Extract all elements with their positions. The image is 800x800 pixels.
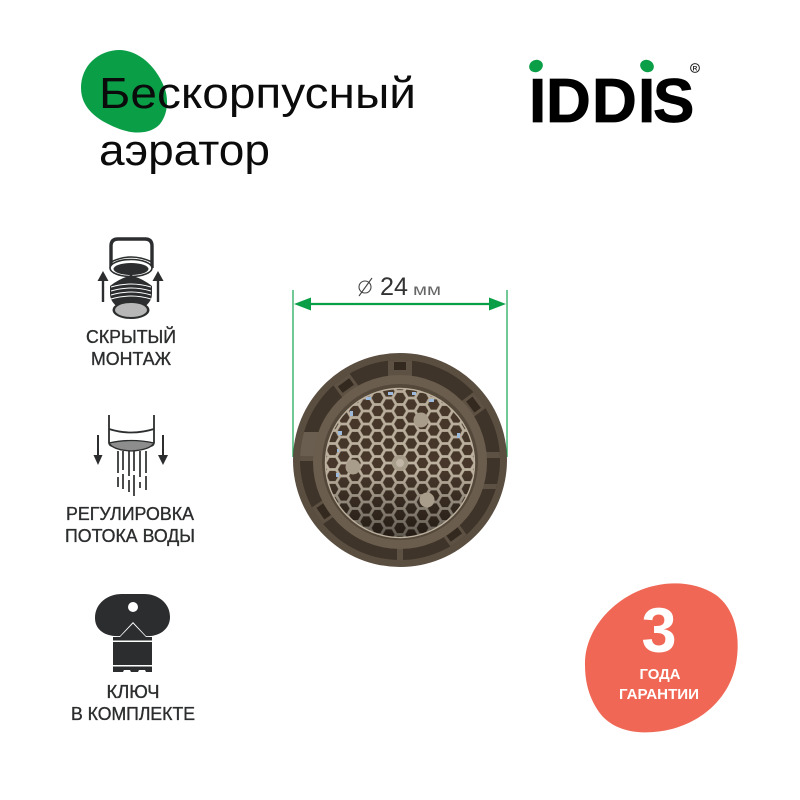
dimension: diameter 24 mm bbox=[293, 273, 507, 457]
title text: Бескорпусный bbox=[99, 69, 416, 118]
recessed band bbox=[300, 360, 500, 560]
honeycomb mesh bbox=[325, 388, 475, 538]
feature: hidden mounting bbox=[86, 239, 176, 369]
coral blob bbox=[585, 583, 738, 732]
label bbox=[86, 326, 176, 369]
label: МОНТАЖ bbox=[91, 349, 171, 369]
outer rim bbox=[293, 353, 507, 567]
product photo: aerator bbox=[293, 353, 507, 567]
logo: IDDIS: IDDIS bbox=[529, 67, 694, 136]
ribs and tabs bbox=[298, 358, 502, 564]
label bbox=[71, 682, 195, 724]
dimension: diameter 24 mm: 24 bbox=[380, 273, 408, 301]
title bbox=[81, 50, 416, 175]
icon: aerator with water streams bbox=[94, 415, 168, 496]
label: В КОМПЛЕКТЕ bbox=[71, 704, 195, 724]
diameter symbol bbox=[359, 278, 372, 296]
label: ПОТОКА ВОДЫ bbox=[65, 526, 195, 546]
label bbox=[65, 504, 195, 546]
logo: IDDIS: R bbox=[693, 66, 698, 72]
inner collar bbox=[313, 375, 487, 549]
title text: аэратор bbox=[99, 126, 270, 175]
feature: water flow regulation bbox=[65, 415, 195, 546]
icon: aerator with upward arrows bbox=[98, 239, 164, 319]
badge label: ГОДА bbox=[640, 666, 681, 683]
label: СКРЫТЫЙ bbox=[86, 326, 176, 347]
icon: key bbox=[95, 594, 170, 672]
big number: 3 bbox=[641, 596, 677, 666]
feature: key included bbox=[71, 594, 195, 724]
label: РЕГУЛИРОВКА bbox=[66, 504, 194, 524]
solid hubs bbox=[346, 412, 434, 508]
green blob bbox=[81, 50, 167, 133]
dimension: diameter 24 mm: мм bbox=[413, 282, 441, 299]
blue highlights bbox=[336, 392, 460, 477]
badge label bbox=[619, 666, 699, 703]
title text bbox=[99, 69, 416, 175]
label: КЛЮЧ bbox=[106, 682, 160, 702]
badge label: ГАРАНТИИ bbox=[619, 686, 699, 703]
warranty badge bbox=[585, 583, 738, 732]
